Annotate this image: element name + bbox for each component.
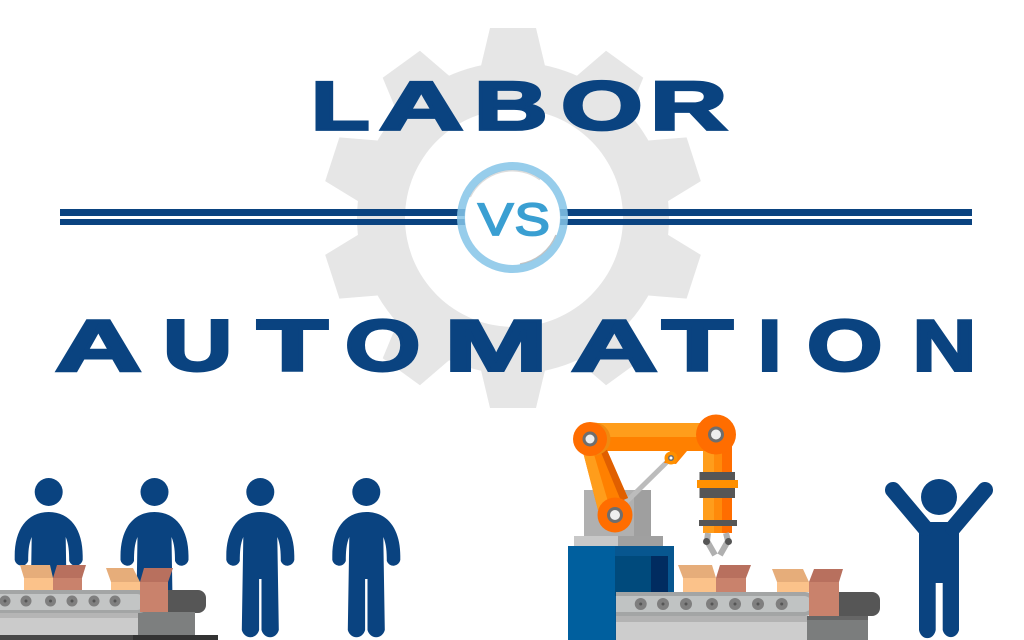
title: LABOR: B: [474, 68, 548, 145]
title: AUTOMATION: U: [163, 305, 232, 386]
title: AUTOMATION: A: [571, 305, 658, 386]
title: AUTOMATION: T: [662, 306, 733, 386]
VS badge: S: [514, 195, 550, 245]
box 4 front panels: [809, 569, 843, 616]
title: AUTOMATION: [55, 305, 976, 387]
double divider lines: [60, 209, 972, 225]
left conveyor rollers: [0, 596, 120, 606]
box 4 back panels: [772, 569, 809, 592]
title: AUTOMATION: M: [444, 306, 548, 386]
title: AUTOMATION: O: [807, 306, 882, 387]
title: AUTOMATION: A: [55, 305, 142, 386]
title: AUTOMATION: T: [257, 306, 328, 386]
right conveyor rollers: [635, 598, 788, 610]
title: LABOR: O: [561, 67, 643, 144]
VS badge: V: [478, 195, 514, 245]
gripper: [703, 533, 732, 555]
title: LABOR: A: [379, 68, 463, 145]
box 2 front panels: [140, 568, 173, 612]
lower arm: [583, 450, 628, 510]
title: LABOR: R: [650, 68, 727, 145]
title: LABOR: [311, 67, 727, 145]
joint: top right: [696, 414, 736, 454]
left conveyor with boxes: [0, 565, 218, 640]
joint: elbow small: [664, 452, 678, 464]
right conveyor with boxes: [616, 565, 880, 640]
title: LABOR: L: [311, 67, 370, 144]
title: AUTOMATION: O: [345, 306, 420, 387]
column: [697, 440, 738, 533]
worker 2: [120, 478, 188, 637]
robot pedestal: [574, 490, 663, 546]
worker 4: [332, 478, 400, 637]
rod: [618, 458, 671, 510]
worker 3: [226, 478, 294, 637]
joint: base: [598, 498, 632, 532]
title: AUTOMATION: N: [913, 306, 976, 387]
background gear: [322, 28, 704, 408]
title: AUTOMATION: I: [758, 305, 781, 386]
robot arm: [573, 414, 738, 555]
box 3: [678, 565, 751, 592]
box 2 back panels: [106, 568, 140, 591]
joint: top left: [573, 422, 610, 456]
box 1: [20, 565, 86, 591]
upper arm: [590, 423, 716, 464]
celebrating worker: [893, 479, 985, 638]
worker 1: [15, 478, 83, 637]
blue machine cabinet: [568, 546, 674, 640]
VS badge: [461, 166, 564, 269]
